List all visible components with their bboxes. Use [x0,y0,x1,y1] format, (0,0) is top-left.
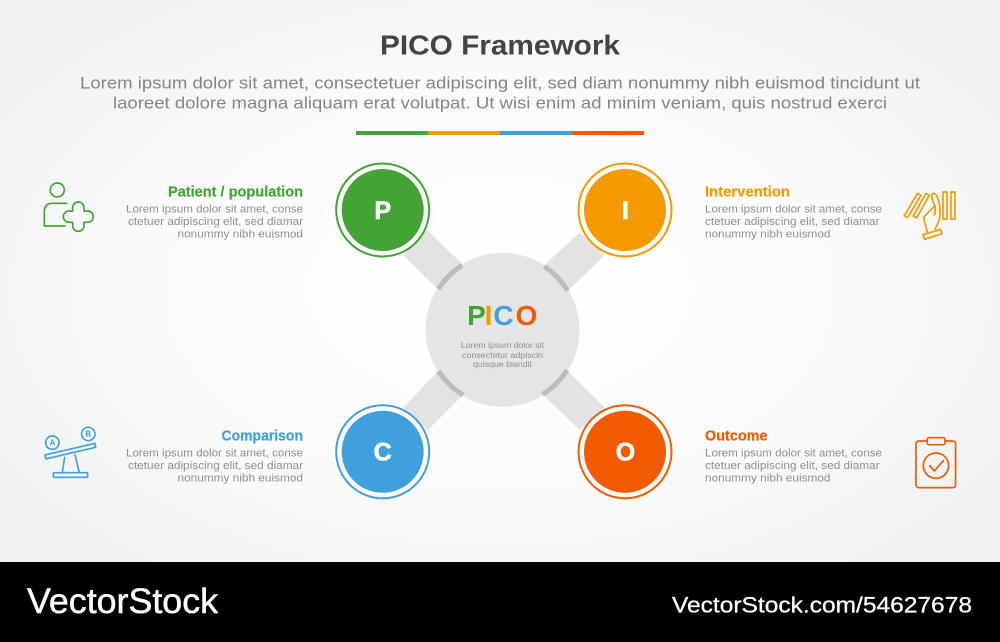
subtitle text: laoreet dolore magna aliquam erat volutpat. Ut wisi enim ad minim veniam, quis nostrud exerci [113,94,887,112]
text block: Outcome [705,428,882,484]
colored title divider [356,131,644,135]
hub PICO wordmark: C [493,300,514,331]
text block: Comparison: Lorem ipsum dolor sit amet, conse [126,448,303,460]
hub description [461,341,545,369]
hub PICO wordmark: I [485,300,492,331]
icon: seesaw comparison: B [85,430,91,439]
footer bar [0,562,1000,642]
text block: Patient / population: nonummy nibh euismod [178,228,303,240]
subtitle text [80,74,920,112]
text block: Comparison: Comparison [222,428,303,444]
icon: seesaw comparison [45,427,96,477]
node O: O [616,438,635,466]
connector bands [403,230,605,430]
text block: Comparison: ctetuer adipiscing elit, sed diamar [128,460,303,472]
text block: Outcome: nonummy nibh euismod [705,472,830,484]
icon: patient with plus [44,183,93,231]
node P [336,164,429,256]
node I: I [622,197,629,225]
icon: hand with tally bars [904,192,955,239]
central hub [426,253,580,407]
node O [578,405,672,498]
text block: Comparison: nonummy nibh euismod [178,472,303,484]
node P: P [374,197,391,225]
hub arc accents [438,265,568,395]
icon: seesaw comparison: A [49,438,55,447]
text block: Patient / population: ctetuer adipiscing elit, sed diamar [128,216,303,228]
text block: Comparison [126,428,303,484]
node I [578,164,672,256]
text block: Intervention: Intervention [705,184,790,200]
subtitle text: Lorem ipsum dolor sit amet, consectetuer adipiscing elit, sed diam nonummy nibh euismod tincidunt ut [80,74,920,92]
text block: Intervention [705,184,882,240]
icon: clipboard check [916,438,956,488]
node C: C [374,438,392,466]
hub description: consectetur adpiscin [462,351,543,360]
text block: Outcome: Lorem ipsum dolor sit amet, conse [705,448,882,460]
text block: Outcome: ctetuer adipiscing elit, sed diamar [705,460,880,472]
text block: Intervention: ctetuer adipiscing elit, sed diamar [705,216,880,228]
text block: Intervention: nonummy nibh euismod [705,228,830,240]
text block: Patient / population: Patient / population [168,184,303,200]
hub description: quisque blandit [473,360,533,369]
title: PICO Framework [380,29,620,60]
text block: Intervention: Lorem ipsum dolor sit amet, conse [705,204,882,216]
hub description: Lorem ipsum dolor sit [461,341,545,350]
node C [336,405,429,498]
hub PICO wordmark: P [467,300,486,331]
text block: Outcome: Outcome [705,428,768,444]
text block: Patient / population: Lorem ipsum dolor sit amet, conse [126,204,303,216]
hub PICO wordmark: O [516,300,537,331]
text block: Patient / population [126,184,303,240]
footer brand: VectorStock [27,582,219,621]
hub PICO wordmark [467,300,537,331]
footer image id: VectorStock.com/54627678 [672,592,972,618]
